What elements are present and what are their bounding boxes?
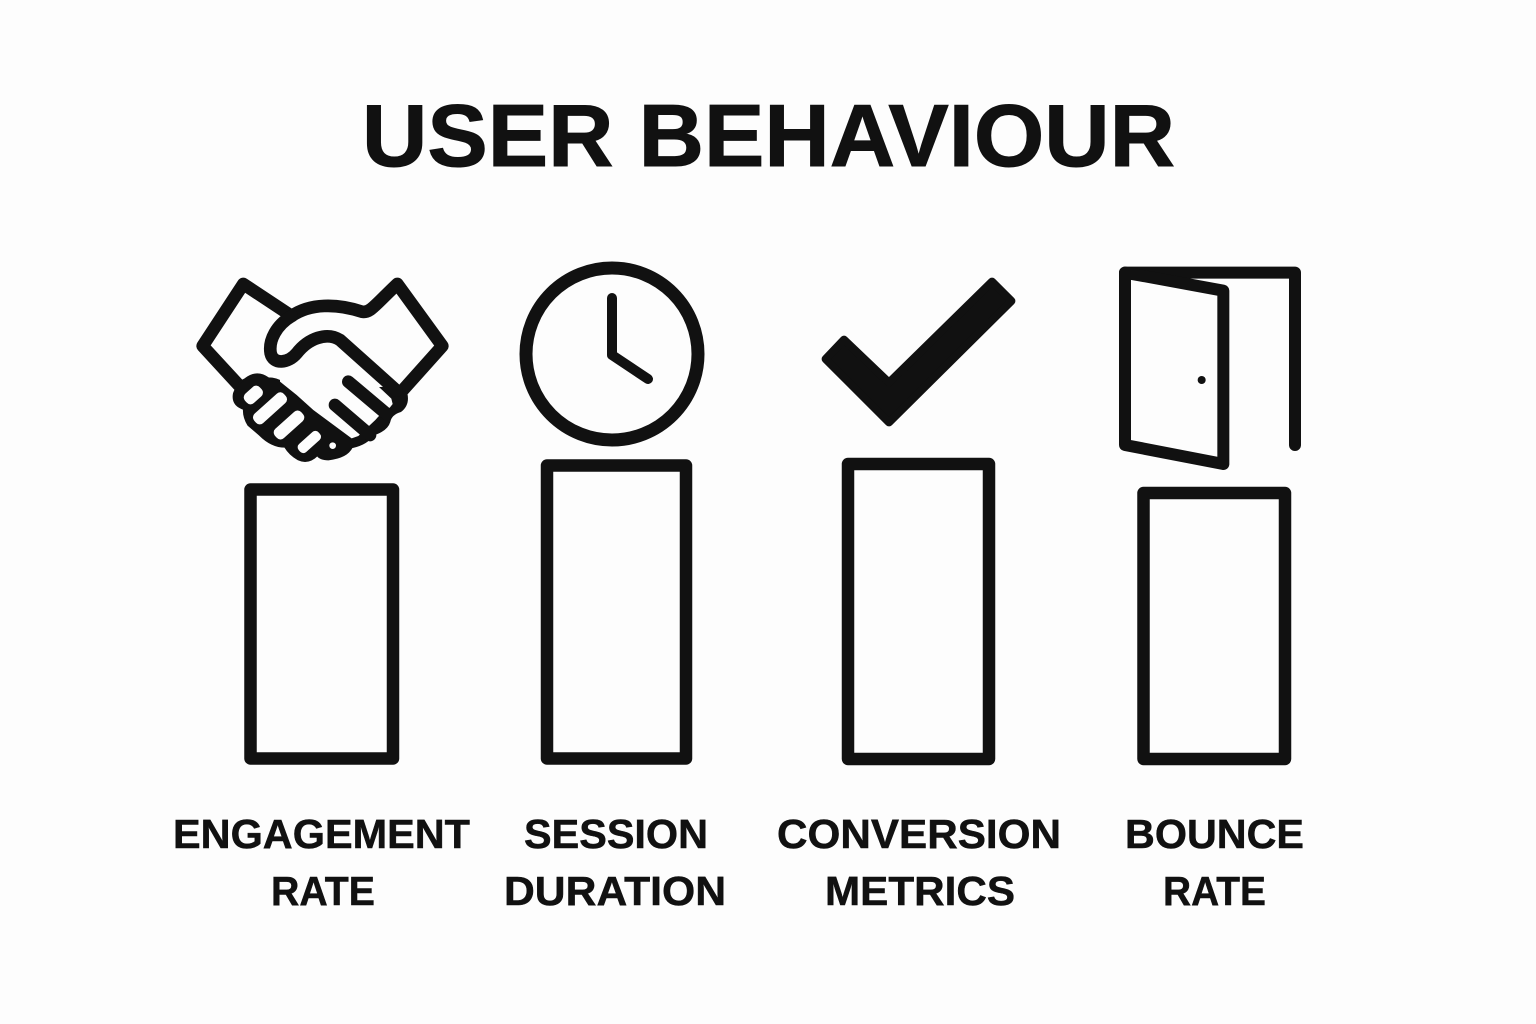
column: engagement rate: [173, 284, 470, 914]
title: USER BEHAVIOUR: [362, 86, 1175, 185]
icon: check mark: [826, 282, 1011, 422]
column: bounce rate: [1125, 273, 1304, 914]
label: bounce rate: [1125, 811, 1304, 914]
label: conversion metrics: METRICS: [825, 868, 1015, 914]
label: session duration: SESSION: [524, 811, 708, 857]
bar: bounce rate: [1144, 493, 1285, 759]
label: conversion metrics: CONVERSION: [777, 811, 1061, 857]
bar: engagement rate: [250, 490, 393, 758]
label: engagement rate: ENGAGEMENT: [173, 811, 470, 857]
column: session duration: [504, 268, 726, 914]
icon: handshake: [203, 284, 442, 461]
label: bounce rate: BOUNCE: [1125, 811, 1304, 857]
label: engagement rate: RATE: [271, 868, 375, 914]
label: engagement rate: [173, 811, 470, 914]
icon: clock: [526, 268, 698, 440]
bar: session duration: [547, 466, 686, 758]
label: bounce rate: RATE: [1163, 868, 1266, 914]
bar: conversion metrics: [848, 464, 989, 759]
label: session duration: DURATION: [504, 868, 726, 914]
label: session duration: [504, 811, 726, 914]
column: conversion metrics: [777, 282, 1061, 914]
label: conversion metrics: [777, 811, 1061, 914]
icon: open door: [1125, 273, 1295, 464]
